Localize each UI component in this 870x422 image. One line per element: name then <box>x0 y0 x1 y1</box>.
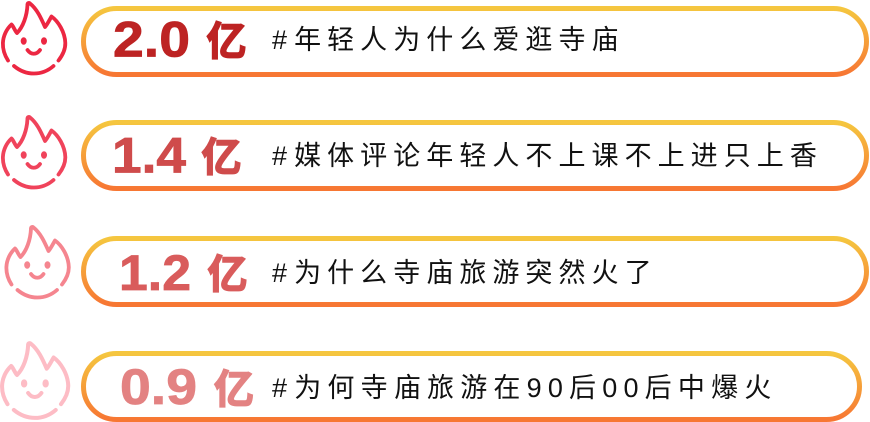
icon: flame face 3 <box>6 227 69 298</box>
value 2: 1.4 <box>112 128 186 184</box>
icon: flame face 4 <box>2 343 68 418</box>
pill frame 2 <box>84 122 866 188</box>
unit 3: 亿 <box>208 242 248 300</box>
row 4: 0.9亿 <box>2 343 860 420</box>
row 2: 1.4亿 <box>3 117 867 188</box>
hashtag 2: #媒体评论年轻人不上课不上进只上香 <box>272 141 823 171</box>
pill frame 1 <box>84 8 866 74</box>
hashtag 4: #为何寺庙旅游在90后00后中爆火 <box>272 373 777 403</box>
row 3: 1.2亿 <box>6 227 867 304</box>
pill frame 3 <box>84 238 866 304</box>
icon: flame face 1 <box>3 3 65 73</box>
hashtag 1: #年轻人为什么爱逛寺庙 <box>272 25 625 55</box>
value 4: 0.9 <box>120 359 197 415</box>
value 3: 1.2 <box>119 245 191 301</box>
row 1: 2.0亿 <box>3 3 867 74</box>
unit 1: 亿 <box>206 9 246 67</box>
hashtag 3: #为什么寺庙旅游突然火了 <box>272 258 658 288</box>
unit 4: 亿 <box>214 357 254 415</box>
unit 2: 亿 <box>202 125 242 183</box>
pill frame 4 <box>84 354 860 420</box>
value 1: 2.0 <box>113 12 190 68</box>
icon: flame face 2 <box>3 117 65 188</box>
